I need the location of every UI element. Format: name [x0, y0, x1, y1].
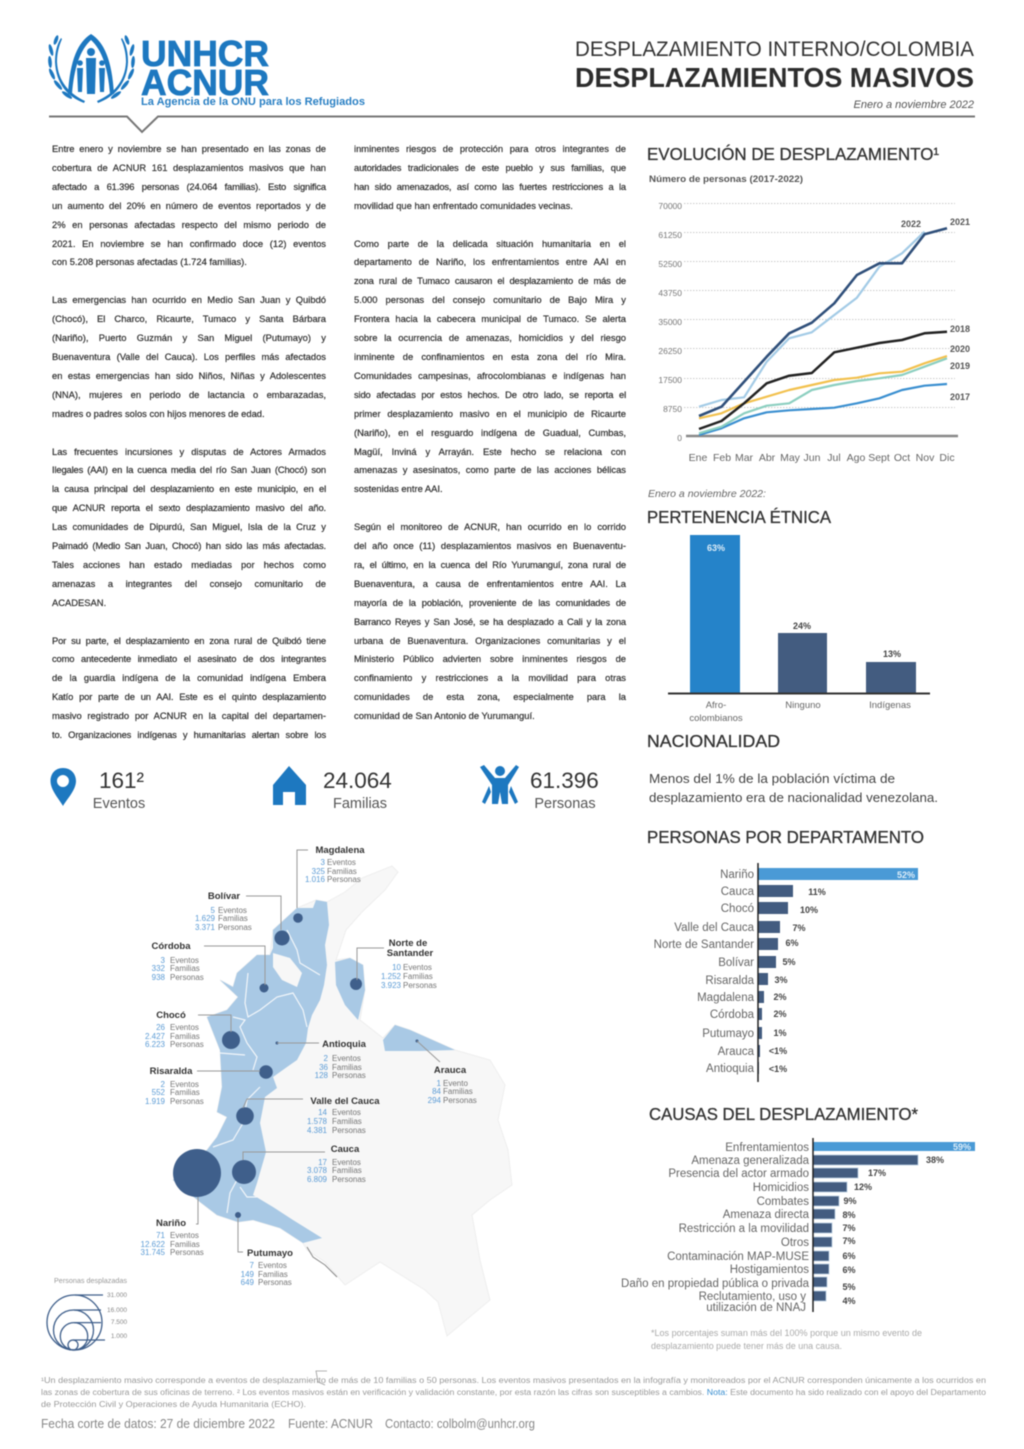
bar chart: causas del desplazamiento: 7%	[842, 1236, 856, 1246]
bar chart: personas por departamento: Magdalena	[697, 992, 755, 1004]
text column 1: Katío por parte de un AAI. Este es el quinto desplazamiento	[52, 691, 326, 702]
bar chart: causas del desplazamiento: Daño en propiedad pública o privada	[621, 1278, 810, 1290]
label: Putumayo: Personas	[258, 1278, 292, 1287]
bar chart: pertenencia étnica: Indígenas	[869, 700, 911, 711]
bar chart: personas por departamento: 7%	[792, 923, 806, 933]
label: Chocó: 26	[156, 1023, 166, 1032]
text column 2: ra, el último, en la cuenca del Río Yurumanguí, zona rural de	[354, 559, 626, 570]
bar chart: pertenencia étnica: 13%	[883, 649, 901, 659]
bar chart: personas por departamento: Bolívar	[718, 957, 754, 969]
label: Chocó: Eventos	[170, 1023, 199, 1032]
label: Cauca: Personas	[332, 1175, 366, 1184]
label: Magdalena	[297, 845, 365, 908]
label: Cauca: 17	[318, 1158, 328, 1167]
label: Norte de Santander: Norte de	[389, 938, 427, 949]
label: Norte de Santander: 1.252	[381, 972, 402, 981]
text column 1: ACADESAN.	[52, 597, 106, 608]
bar chart: causas del desplazamiento: 8%	[842, 1210, 856, 1220]
text column 1: madres o padres solos con hijos menores de edad.	[52, 408, 265, 419]
bar chart: pertenencia étnica: Afro-	[706, 700, 726, 711]
KPI: eventos	[50, 768, 145, 812]
bar chart: causas del desplazamiento: 6%	[842, 1265, 856, 1275]
label: Putumayo: Familias	[258, 1270, 288, 1279]
footnote: causas: desplazamiento puede tener más de una causa.	[651, 1341, 842, 1351]
bar chart: causas del desplazamiento: Amenaza directa	[723, 1209, 810, 1221]
country base	[173, 866, 512, 1336]
text column 2: zona rural de Tumaco causaron el desplazamiento de más de	[354, 275, 626, 286]
bar chart: causas del desplazamiento: 7%	[842, 1223, 856, 1233]
bar chart: pertenencia étnica: Ninguno	[785, 700, 821, 711]
label: Risaralda: Eventos	[170, 1080, 199, 1089]
line chart: evolución 2017-2022: 2022	[901, 219, 921, 229]
bar chart: personas por departamento	[654, 863, 918, 1082]
label: Norte de Santander: Familias	[403, 972, 433, 981]
label: Antioquia: 36	[319, 1063, 329, 1072]
text column 1: amenazas a integrantes del consejo comunitario de	[52, 578, 326, 589]
line chart: evolución 2017-2022: Mar	[735, 452, 754, 464]
page title	[575, 38, 974, 111]
label: Arauca: Evento	[443, 1079, 468, 1088]
label: Bolívar: Personas	[218, 923, 252, 932]
value: 24.064	[323, 768, 392, 793]
bar chart: personas por departamento: Norte de Santander	[654, 939, 754, 951]
footnotes: ¹Un desplazamiento masivo corresponde a eventos de desplazamiento de más de 10 familias o 50 personas. Los eventos masivos presentados en la infografía y monitoreados por el ACNUR corresponden únicamente a los ocurridos en	[41, 1376, 986, 1385]
text column 1: en estas emergencias han sido Niños, Niñas y Adolescentes	[52, 370, 326, 381]
text column 2: amenazas y asesinatos, como parte de las acciones bélicas	[354, 464, 626, 475]
text column 2: Frontera hacia la cabecera municipal de Tumaco. Se alerta	[354, 313, 626, 324]
label: Valle del Cauca: 4.381	[307, 1126, 328, 1135]
bar chart: causas del desplazamiento: Presencia del actor armado	[668, 1168, 809, 1180]
label: Arauca: 84	[432, 1087, 442, 1096]
label: Chocó: Familias	[170, 1032, 200, 1041]
label: Bolívar: Eventos	[218, 906, 247, 915]
label: Putumayo: 649	[241, 1278, 255, 1287]
label: Antioquia	[277, 1039, 367, 1080]
text column 1: cobertura de ACNUR 161 desplazamientos masivos que han	[52, 162, 326, 173]
text column 2: del año once (11) desplazamientos masivos en Buenaventu-	[354, 540, 626, 551]
line chart: evolución 2017-2022: 17500	[658, 375, 682, 385]
text column 1: Las frecuentes incursiones y disputas de Actores Armados	[52, 446, 326, 456]
line chart: evolución 2017-2022: 2021	[950, 217, 970, 227]
line chart: evolución 2017-2022: 26250	[658, 346, 682, 356]
footer: fecha, fuente, contacto: Fecha corte de datos: 27 de diciembre 2022	[41, 1417, 275, 1431]
label: Bolívar: 5	[211, 906, 216, 915]
value: 161²	[99, 768, 145, 793]
subheading: número de personas: Número de personas (2017-2022)	[649, 174, 803, 185]
label: Córdoba: 332	[152, 964, 166, 973]
label: Valle del Cauca: 1.578	[307, 1117, 328, 1126]
bar chart: causas del desplazamiento: Reclutamiento, uso y	[699, 1291, 806, 1303]
label: Norte de Santander: 3.923	[381, 981, 402, 990]
label: Putumayo: Putumayo	[247, 1248, 293, 1259]
text column 2: sobre la ocurrencia de amenazas, homicidios y del riesgo	[354, 332, 626, 343]
label: Valle del Cauca: Eventos	[332, 1108, 361, 1117]
label: Norte de Santander: Santander	[387, 948, 434, 959]
bar chart: causas del desplazamiento: Contaminación MAP-MUSE	[667, 1251, 809, 1263]
text column 1: Entre enero y noviembre se han presentado en las zonas de	[52, 143, 326, 154]
label: Nariño: Personas	[170, 1248, 204, 1257]
line chart: evolución 2017-2022: Jul	[827, 452, 841, 464]
text column 1: Paimadó (Medio San Juan, Chocó) han sido las más afectadas.	[52, 540, 326, 551]
heading: personas por departamento: PERSONAS POR DEPARTAMENTO	[647, 827, 924, 847]
text column 2: Como parte de la delicada situación humanitaria en el	[354, 238, 626, 249]
logo wordmark UNHCR: UNHCR	[141, 33, 269, 74]
line chart: evolución 2017-2022: Nov	[916, 452, 935, 464]
line chart: evolución 2017-2022: 2018	[950, 324, 970, 334]
label: Magdalena: 1.016	[305, 875, 326, 884]
label: Norte de Santander	[357, 938, 437, 990]
text column 1: como antecedente inmediato el asesinato de dos integrantes	[52, 653, 326, 664]
label: Risaralda: Risaralda	[150, 1066, 193, 1077]
icon: house	[273, 766, 306, 805]
text column 1: un aumento del 20% en número de eventos reportados y de	[52, 200, 326, 211]
label: Cauca	[243, 1144, 366, 1184]
heading: nacionalidad: NACIONALIDAD	[647, 731, 780, 751]
label: Córdoba: Familias	[170, 964, 200, 973]
text column 2: confinamiento y restricciones a la movilidad para otras	[354, 672, 626, 683]
label: Córdoba: 3	[161, 956, 166, 965]
bar chart: personas por departamento: 1%	[773, 1028, 787, 1038]
legend: personas desplazadas: 1.000	[111, 1333, 128, 1340]
line chart: evolución 2017-2022: 0	[677, 433, 682, 443]
bar chart: pertenencia étnica: 24%	[793, 621, 811, 631]
text column 1: que ACNUR reporta el sexto desplazamiento masivo del año.	[52, 502, 326, 513]
value: 61.396	[530, 768, 599, 793]
line chart: evolución 2017-2022: 2017	[950, 392, 970, 402]
label: Cauca: 6.809	[307, 1175, 328, 1184]
bar chart: personas por departamento: 3%	[774, 975, 788, 985]
text column 2: 5.000 personas del consejo comunitario de Bajo Mira y	[354, 294, 626, 305]
map of Colombia	[141, 845, 512, 1336]
text column 2: departamento de Nariño, los enfrentamientos entre AAI en	[354, 256, 626, 267]
label: Valle del Cauca: 14	[318, 1108, 328, 1117]
icon: UNHCR emblem	[48, 34, 135, 103]
text column 1: Ilegales (AAI) en la cuenca media del río San Juan (Chocó) son	[52, 464, 326, 475]
text column 1: afectado a 61.396 personas (24.064 familias). Esto significa	[52, 181, 326, 192]
label: Chocó: 2.427	[145, 1032, 166, 1041]
label: Magdalena: Familias	[327, 867, 357, 876]
label: Personas	[534, 796, 596, 812]
label: Cauca: Eventos	[332, 1158, 361, 1167]
text column 1	[51, 143, 327, 741]
label: Arauca: Familias	[443, 1087, 473, 1096]
label: Nariño: Eventos	[170, 1231, 199, 1240]
label: Córdoba: Personas	[170, 973, 204, 982]
heading: pertenencia étnica: PERTENENCIA ÉTNICA	[647, 507, 831, 527]
line chart: evolución 2017-2022: 61250	[658, 230, 682, 240]
text column 2	[354, 143, 627, 722]
label: Valle del Cauca: Valle del Cauca	[310, 1096, 380, 1107]
text column 1: con 5.208 personas afectadas (1.724 familias).	[52, 256, 247, 267]
KPI: familias	[273, 766, 392, 812]
bar chart: personas por departamento: Valle del Cauca	[674, 922, 755, 934]
bubbles	[173, 913, 418, 1218]
text: nacionalidad	[649, 771, 938, 805]
bar chart: personas por departamento: Nariño	[720, 869, 754, 881]
bar chart: causas del desplazamiento: 6%	[842, 1251, 856, 1261]
label: Antioquia: 128	[315, 1071, 329, 1080]
label: Nariño: Familias	[170, 1240, 200, 1249]
label: Antioquia: Antioquia	[322, 1039, 367, 1050]
label: Arauca: 294	[428, 1096, 442, 1105]
line chart: evolución 2017-2022: 52500	[658, 259, 682, 269]
label: Antioquia: Personas	[332, 1071, 366, 1080]
text column 2: mayoría de la población, proveniente de las comunidades de	[354, 597, 626, 608]
label: Valle del Cauca: Personas	[332, 1126, 366, 1135]
text column 1: Por su parte, el desplazamiento en zona rural de Quibdó tiene	[52, 635, 326, 646]
line chart: evolución 2017-2022: 2020	[950, 344, 970, 354]
text column 1: masivo registrado por ACNUR en la capital del departamen-	[52, 710, 326, 721]
bar chart: causas del desplazamiento: 17%	[868, 1168, 886, 1178]
text column 1: de la guardia indígena de la comunidad indígena Embera	[52, 672, 326, 683]
label: Cauca: Familias	[332, 1166, 362, 1175]
bar chart: causas del desplazamiento: Combates	[757, 1196, 809, 1208]
bar chart: personas por departamento: 2%	[773, 1009, 787, 1019]
text column 2: comunidad de San Antonio de Yurumanguí.	[354, 710, 535, 721]
footnotes: de Protección Civil y Operaciones de Ayuda Humanitaria (ECHO).	[41, 1400, 306, 1409]
footnotes: las zonas de cobertura de sus oficinas de terreno. ² Los eventos masivos están en verificación y validación constante, por esta razón las cifras son susceptibles a cambios. Nota: Este documento ha sido realizado con el apoyo del Departamento	[41, 1388, 987, 1397]
label: Putumayo: 7	[250, 1261, 255, 1270]
line chart: evolución 2017-2022: Jun	[804, 452, 821, 464]
legend: personas desplazadas: Personas desplazadas	[54, 1278, 128, 1285]
bar chart: personas por departamento: Antioquia	[706, 1063, 755, 1075]
bar chart: causas del desplazamiento: Restricción a la movilidad	[679, 1223, 809, 1235]
footnote: causas	[651, 1328, 922, 1351]
label: Putumayo	[238, 1218, 293, 1287]
label: Magdalena: 325	[312, 867, 326, 876]
text column 1: 2% en personas afectadas respecto del mismo periodo de	[52, 219, 326, 230]
KPI: personas	[480, 765, 599, 812]
bar chart: causas del desplazamiento: Hostigamientos	[730, 1264, 809, 1276]
line chart: evolución 2017-2022: Sept	[868, 452, 890, 464]
text column 1: 2021. En noviembre se han confirmado doce (12) eventos	[52, 238, 326, 249]
line chart: evolución 2017-2022: 43750	[658, 288, 682, 298]
label: Cauca: Cauca	[331, 1144, 360, 1155]
bar chart: personas por departamento: Risaralda	[705, 975, 755, 987]
label: Chocó: 6.223	[145, 1040, 166, 1049]
label: Magdalena: Eventos	[327, 858, 356, 867]
bar chart: causas del desplazamiento: 9%	[843, 1196, 857, 1206]
bar chart: pertenencia étnica: colombianos	[689, 713, 743, 724]
bar chart: causas del desplazamiento: Homicidios	[753, 1182, 809, 1194]
label: Córdoba: Córdoba	[151, 941, 191, 952]
text column 2: sostenidas entre AAI.	[354, 483, 443, 494]
line chart: evolución 2017-2022: Dic	[939, 452, 955, 464]
line chart: evolución 2017-2022: Abr	[759, 452, 776, 464]
label: Antioquia: Eventos	[332, 1054, 361, 1063]
text column 2: inminente de confinamientos en esta zona del río Mira.	[354, 351, 626, 362]
bar chart: causas del desplazamiento: Enfrentamientos	[725, 1142, 809, 1154]
line chart: evolución 2017-2022: Ago	[847, 452, 865, 464]
bar chart: causas del desplazamiento: 59%	[953, 1142, 971, 1152]
bar chart: personas por departamento: Arauca	[718, 1046, 755, 1058]
label: Antioquia: Familias	[332, 1063, 362, 1072]
text column 2: Buenaventura, a causa de enfrentamientos entre AAI. La	[354, 578, 626, 589]
label: Bolívar	[195, 891, 281, 932]
label: Risaralda: 2	[161, 1080, 166, 1089]
line chart: evolución 2017-2022: 2019	[950, 361, 970, 371]
label: Córdoba: Eventos	[170, 956, 199, 965]
footer: fecha, fuente, contacto: Fuente: ACNUR	[288, 1417, 373, 1431]
title line 1: DESPLAZAMIENTO INTERNO/COLOMBIA	[575, 38, 974, 61]
line chart: evolución 2017-2022	[658, 201, 970, 464]
label: Bolívar: 1.629	[195, 914, 216, 923]
header logo: UNHCR ACNUR	[48, 33, 365, 108]
footnote: causas: *Los porcentajes suman más del 100% porque un mismo evento de	[651, 1328, 922, 1338]
icon: location pin	[50, 768, 76, 806]
bar chart: personas por departamento: 52%	[897, 870, 915, 880]
label: Nariño: Nariño	[156, 1218, 186, 1229]
bar chart: pertenencia étnica	[668, 535, 930, 724]
bar chart: personas por departamento: <1%	[769, 1046, 787, 1056]
label: Arauca: Arauca	[434, 1065, 467, 1076]
label: Chocó: Chocó	[156, 1010, 186, 1021]
heading: causas del desplazamiento: CAUSAS DEL DESPLAZAMIENTO*	[649, 1104, 918, 1124]
label: Chocó	[145, 1010, 231, 1049]
text column 1: to. Organizaciones indígenas y humanitarias alertan sobre los	[52, 729, 326, 740]
label: Risaralda: Familias	[170, 1088, 200, 1097]
bar chart: causas del desplazamiento: 38%	[926, 1155, 944, 1165]
label: Valle del Cauca	[243, 1096, 380, 1135]
label: Magdalena: Magdalena	[315, 845, 365, 856]
line chart: evolución 2017-2022: Oct	[894, 452, 910, 464]
label: Arauca	[417, 1041, 477, 1105]
label: Valle del Cauca: Familias	[332, 1117, 362, 1126]
label: Cauca: 3.078	[307, 1166, 328, 1175]
note: enero a noviembre: Enero a noviembre 2022:	[648, 488, 766, 500]
label: Magdalena: 3	[321, 858, 326, 867]
label: Familias	[333, 796, 387, 812]
label: Norte de Santander: 10	[392, 963, 402, 972]
bar chart: causas del desplazamiento: Otros	[781, 1237, 809, 1249]
legend: personas desplazadas: 16.000	[107, 1307, 127, 1314]
icon: displaced person	[480, 765, 519, 804]
line chart: evolución 2017-2022: 70000	[658, 201, 682, 211]
logo wordmark ACNUR: ACNUR	[141, 62, 269, 103]
text: nacionalidad: Menos del 1% de la población víctima de	[649, 771, 895, 786]
label: Bolívar: Familias	[218, 914, 248, 923]
text column 1: Buenaventura (Valle del Cauca). Los perfiles más afectados	[52, 351, 326, 362]
footer: fecha, fuente, contacto: Contacto: colbolm@unhcr.org	[385, 1417, 535, 1431]
text column 2: han sido amenazados, así como las fuertes restricciones a la	[354, 181, 626, 192]
line chart: evolución 2017-2022: Feb	[713, 452, 731, 464]
text: nacionalidad: desplazamiento era de nacionalidad venezolana.	[649, 790, 938, 805]
text column 1: (Nariño), Puerto Guzmán y San Miguel (Putumayo) y	[52, 332, 326, 343]
text column 2: Según el monitoreo de ACNUR, han ocurrido en lo corrido	[354, 521, 626, 532]
date subtitle: Enero a noviembre 2022	[854, 99, 974, 111]
text column 2: primer desplazamiento masivo en el municipio de Ricaurte	[354, 408, 626, 419]
text column 1: Las comunidades de Dipurdú, San Miguel, Isla de la Cruz y	[52, 521, 326, 532]
label: Putumayo: Eventos	[258, 1261, 287, 1270]
label: Eventos	[93, 796, 145, 812]
affected departments	[173, 900, 329, 1243]
text column 2: (Nariño), en el resguardo indígena de Guadual, Cumbas,	[354, 427, 626, 438]
text column 2: Magüí, Inviná y Arrayán. Este hecho se relaciona con	[354, 446, 626, 456]
label: Antioquia: 2	[324, 1054, 329, 1063]
label: Risaralda: Personas	[170, 1097, 204, 1106]
bar chart: personas por departamento: <1%	[769, 1064, 787, 1074]
logo tagline: La Agencia de la ONU para los Refugiados	[141, 96, 365, 108]
line chart: evolución 2017-2022: 35000	[658, 317, 682, 327]
label: Nariño: 31.745	[141, 1248, 166, 1257]
text column 1: (Chocó), El Charco, Ricaurte, Tumaco y Santa Bárbara	[52, 313, 326, 324]
label: Risaralda	[145, 1066, 260, 1106]
text column 1: Las emergencias han ocurrido en Medio San Juan y Quibdó	[52, 294, 326, 305]
bar chart: causas del desplazamiento	[621, 1138, 975, 1314]
label: Norte de Santander: Eventos	[403, 963, 432, 972]
text column 2: Comunidades campesinas, afrocolombianas e indígenas han	[354, 370, 626, 381]
bar chart: causas del desplazamiento: 5%	[842, 1282, 856, 1292]
label: Nariño: 71	[156, 1231, 166, 1240]
label: Bolívar: 3.371	[195, 923, 216, 932]
bar chart: personas por departamento: 10%	[800, 905, 818, 915]
line chart: evolución 2017-2022: Ene	[689, 452, 707, 464]
text column 1: Tales acciones han estado mediadas por hechos como	[52, 559, 326, 570]
legend: personas desplazadas: 31.000	[107, 1292, 127, 1299]
text column 2: autoridades tradicionales de este pueblo y sus familias, que	[354, 162, 626, 173]
text column 2: urbana de Buenaventura. Organizaciones comunitarias y el	[354, 635, 626, 646]
bar chart: causas del desplazamiento: 4%	[842, 1296, 856, 1306]
bar chart: personas por departamento: Chocó	[721, 903, 754, 915]
bar chart: causas del desplazamiento: Amenaza generalizada	[691, 1155, 810, 1167]
footnotes	[41, 1376, 987, 1409]
label: Putumayo: 149	[241, 1270, 255, 1279]
text column 1: la causa principal del desplazamiento en este municipio, en el	[52, 483, 326, 494]
label: Magdalena: Personas	[327, 875, 361, 884]
footer: fecha, fuente, contacto	[41, 1417, 535, 1431]
label: Chocó: Personas	[170, 1040, 204, 1049]
text column 1: (NNA), mujeres en periodo de lactancia o embarazadas,	[52, 389, 326, 400]
legend: personas desplazadas: 7.500	[111, 1319, 128, 1326]
bar chart: personas por departamento: Cauca	[721, 886, 755, 898]
label: Córdoba	[151, 941, 265, 985]
label: Risaralda: 552	[152, 1088, 166, 1097]
label: Arauca: Personas	[443, 1096, 477, 1105]
line chart: evolución 2017-2022: 8750	[663, 404, 682, 414]
label: Córdoba: 938	[152, 973, 166, 982]
bar chart: causas del desplazamiento: 12%	[854, 1182, 872, 1192]
bar chart: personas por departamento: Putumayo	[702, 1028, 754, 1040]
text column 2: inminentes riesgos de protección para otros integrantes de	[354, 143, 626, 154]
heading: evolución: EVOLUCIÓN DE DESPLAZAMIENTO¹	[647, 143, 939, 164]
bar chart: personas por departamento: 2%	[773, 992, 787, 1002]
label: Nariño	[141, 1197, 204, 1257]
bar chart: personas por departamento: 6%	[785, 938, 799, 948]
text column 2: Barranco Reyes y San José, se ha desplazado a Cali y la zona	[354, 616, 626, 627]
bar chart: personas por departamento: Córdoba	[710, 1009, 755, 1021]
label: Norte de Santander: Personas	[403, 981, 437, 990]
text column 2: movilidad que han enfrentado comunidades vecinas.	[354, 200, 573, 211]
label: Risaralda: 1.919	[145, 1097, 166, 1106]
label: Arauca: 1	[437, 1079, 442, 1088]
label: Bolívar: Bolívar	[208, 891, 240, 902]
text column 2: sido afectadas por estos hechos. De otro lado, se reporta el	[354, 389, 626, 400]
line chart: evolución 2017-2022: May	[780, 452, 801, 464]
bar chart: pertenencia étnica: 63%	[707, 543, 725, 553]
label: Nariño: 12.622	[141, 1240, 166, 1249]
bar chart: personas por departamento: 5%	[782, 957, 796, 967]
text column 2: Ministerio Público advierten sobre inminentes riesgos de	[354, 653, 626, 664]
text column 2: comunidades de esta zona, especialmente para la	[354, 691, 626, 702]
bar chart: personas por departamento: 11%	[808, 887, 826, 897]
legend: personas desplazadas	[47, 1278, 128, 1350]
title line 2: DESPLAZAMIENTOS MASIVOS	[575, 62, 974, 93]
bar chart: causas del desplazamiento: utilización de NNAJ	[706, 1302, 806, 1314]
